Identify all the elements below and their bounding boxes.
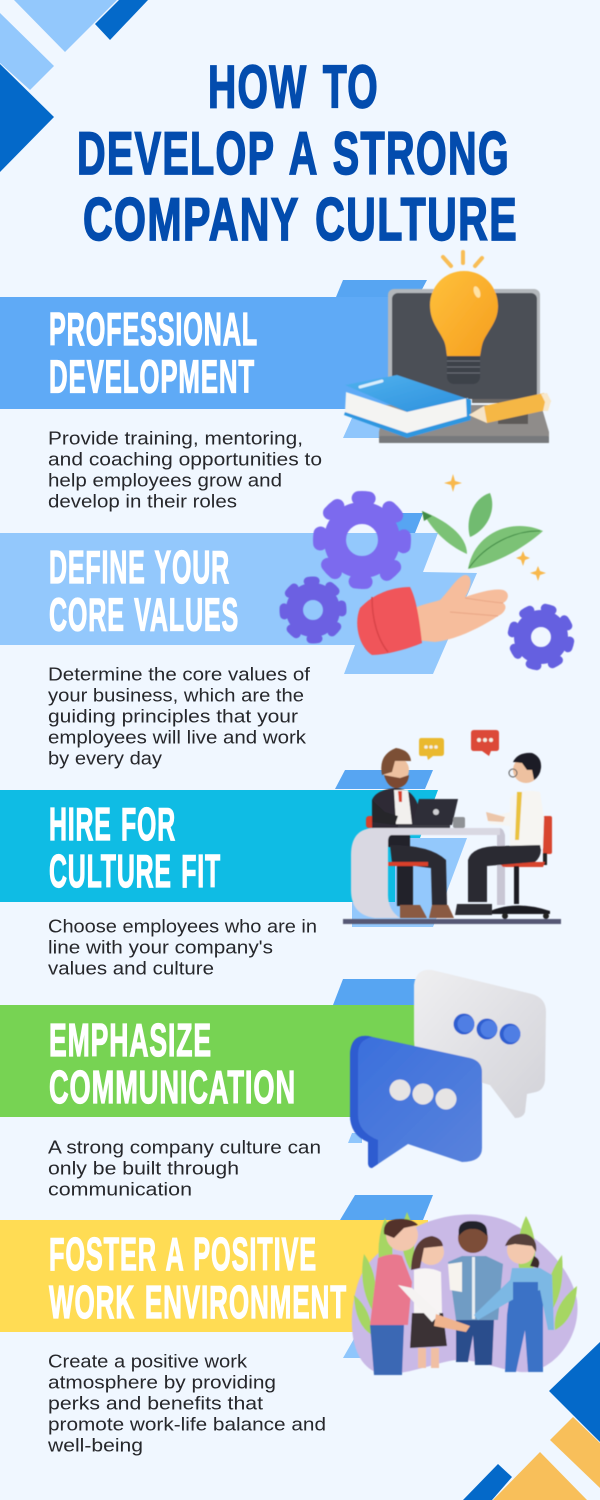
- body text: [47, 1352, 326, 1456]
- icon: two people meeting at a desk: [343, 730, 561, 924]
- band shapes: [0, 770, 467, 927]
- body text: line with your company's: [48, 938, 273, 958]
- icon: right gear: [508, 604, 574, 670]
- body text: Provide training, mentoring,: [48, 428, 303, 448]
- icon: hand: [404, 575, 508, 642]
- band shapes: [0, 979, 425, 1143]
- body text: A strong company culture can: [48, 1138, 321, 1158]
- body text: Create a positive work: [48, 1352, 248, 1372]
- icon: team of four with joined hands: [352, 1212, 578, 1375]
- person: woman in white top: [410, 1236, 447, 1368]
- icon: chat bubbles: [350, 970, 546, 1168]
- person: right: [455, 753, 552, 919]
- heading: DEVELOPMENT: [49, 350, 255, 402]
- body text: develop in their roles: [48, 492, 237, 512]
- body text: promote work-life balance and: [48, 1414, 326, 1434]
- heading: PROFESSIONAL: [49, 303, 258, 355]
- heading: FOSTER A POSITIVE: [49, 1228, 317, 1280]
- band shapes: [0, 280, 427, 438]
- icon: large gear: [316, 494, 408, 586]
- heading: [49, 1014, 296, 1113]
- icon: laptop, light bulb, book and pencil: [344, 252, 551, 443]
- body text: well-being: [47, 1436, 143, 1456]
- body text: [48, 664, 311, 768]
- icon: sparkles: [444, 474, 546, 581]
- body text: [48, 428, 322, 512]
- title: [77, 54, 518, 253]
- heading: [49, 1228, 347, 1328]
- body text: values and culture: [48, 958, 214, 978]
- heading: COMMUNICATION: [49, 1061, 296, 1113]
- heading: CORE VALUES: [49, 588, 239, 640]
- body text: atmosphere by providing: [48, 1372, 276, 1392]
- person: left, bearded: [366, 748, 454, 918]
- body text: communication: [48, 1180, 192, 1200]
- heading: DEFINE YOUR: [49, 541, 230, 593]
- heading: HIRE FOR: [49, 798, 176, 850]
- band shapes: [0, 1195, 433, 1358]
- icon: speech bubbles: [419, 730, 499, 760]
- panel: emphasize communication: [0, 970, 546, 1200]
- body text: guiding principles that your: [48, 706, 298, 726]
- body text: Determine the core values of: [48, 664, 311, 684]
- heading: [49, 303, 258, 402]
- body text: [48, 916, 317, 978]
- icon: white chat bubble: [414, 970, 546, 1118]
- body text: and coaching opportunities to: [48, 450, 322, 470]
- icon: leaves: [422, 493, 543, 569]
- body text: Choose employees who are in: [48, 916, 317, 936]
- person: man in blue vest: [448, 1221, 503, 1365]
- person: woman in blue overalls: [474, 1234, 554, 1372]
- body text: [48, 1138, 321, 1200]
- person: man in pink: [370, 1219, 470, 1375]
- panel: professional development: [0, 252, 551, 512]
- panel: define your core values: [0, 474, 574, 768]
- heading: [49, 798, 221, 897]
- body text: perks and benefits that: [48, 1394, 263, 1414]
- floor: [343, 919, 561, 924]
- desk: [351, 828, 505, 918]
- body text: only be built through: [48, 1158, 239, 1178]
- heading: CULTURE FIT: [49, 845, 221, 897]
- icon: blue chat bubble: [350, 1036, 482, 1168]
- body text: by every day: [48, 748, 162, 768]
- body text: employees will live and work: [48, 728, 307, 748]
- icon: gears, hand and leaves: [279, 474, 574, 670]
- title: HOW TO: [208, 54, 379, 120]
- band shapes: [0, 513, 477, 674]
- heading: WORK ENVIRONMENT: [49, 1276, 347, 1328]
- corner decoration: top left: [0, 0, 148, 172]
- icon: small gear: [279, 576, 347, 644]
- body text: your business, which are the: [48, 686, 304, 706]
- leaves: [354, 1212, 577, 1335]
- heading: [49, 541, 239, 640]
- panel: hire for culture fit: [0, 730, 561, 978]
- heading: EMPHASIZE: [49, 1014, 212, 1066]
- panel: foster a positive work environment: [0, 1195, 578, 1456]
- body text: help employees grow and: [48, 470, 282, 490]
- corner decoration: bottom right: [463, 1342, 600, 1500]
- purple blob: [352, 1214, 578, 1374]
- icon: cuff: [357, 587, 422, 655]
- laptop: [398, 799, 465, 828]
